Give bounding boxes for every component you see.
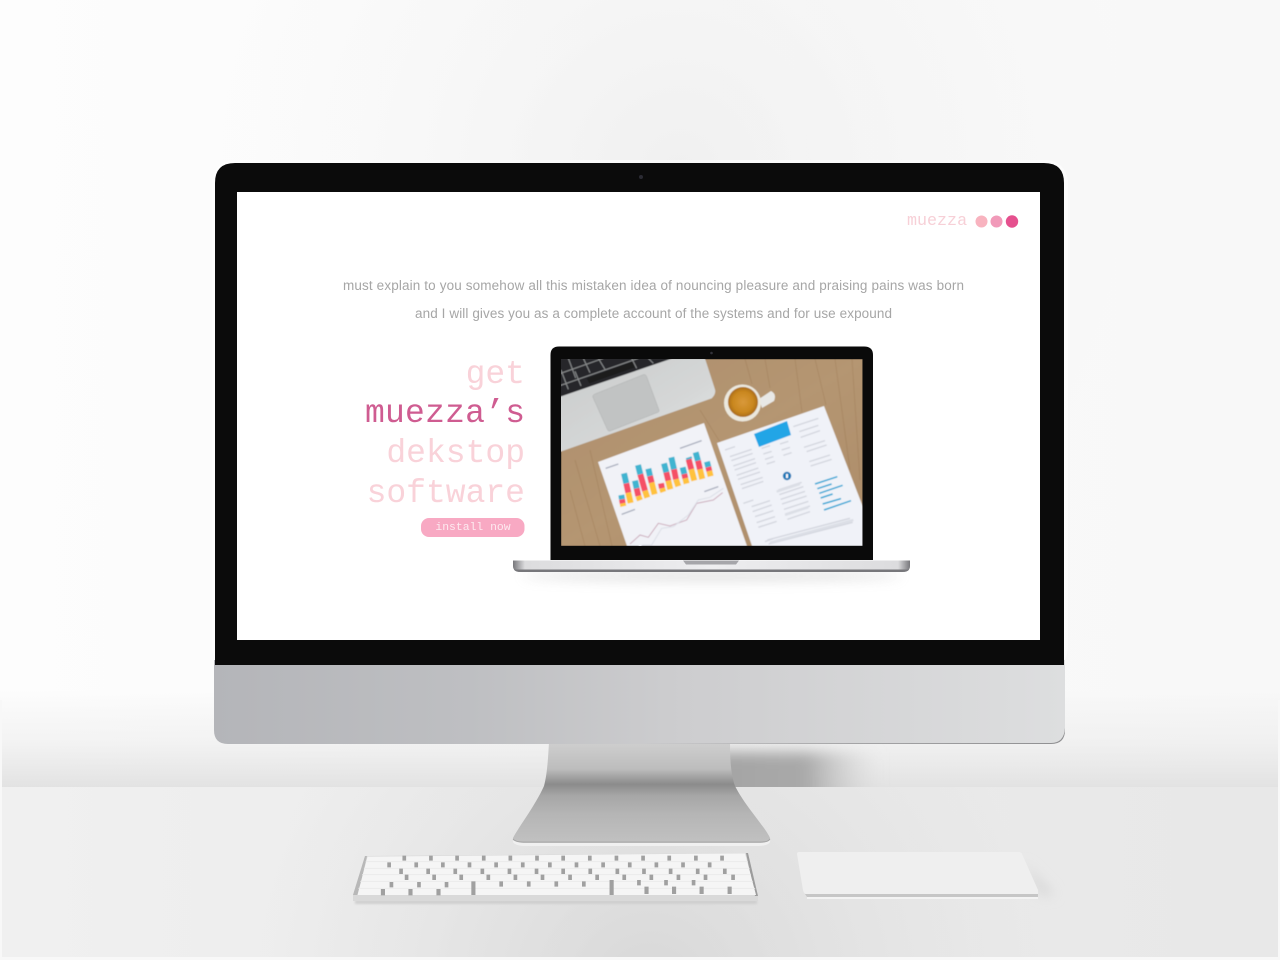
brand name: muezza — [907, 212, 967, 231]
monitor chin — [214, 660, 1065, 744]
intro paragraph: must explain to you somehow all this mistaken idea of nouncing pleasure and praising pains was born — [343, 278, 964, 293]
headline — [365, 356, 525, 512]
brand logo — [907, 212, 1018, 231]
coffee cup — [724, 384, 775, 422]
keyboard — [353, 853, 758, 904]
monitor camera — [639, 175, 643, 179]
report paper — [717, 406, 863, 546]
chart paper — [598, 423, 747, 550]
headline: dekstop — [386, 435, 525, 472]
trackpad rim — [805, 894, 1038, 897]
keyboard shadow — [355, 900, 757, 904]
install button — [421, 518, 524, 537]
headline: get — [466, 356, 525, 393]
laptop shadow — [522, 571, 902, 581]
brand dots — [976, 215, 1018, 228]
photo trackpad — [593, 375, 659, 431]
photo laptop — [555, 358, 715, 454]
report text lines — [725, 418, 853, 544]
headline: muezza’s — [365, 395, 525, 432]
desk photo — [555, 358, 863, 550]
image edge strips — [0, 700, 1280, 960]
trackpad shadow — [1022, 862, 1055, 895]
trackpad — [797, 852, 1055, 899]
monitor stand — [513, 742, 770, 846]
report blue header — [754, 421, 791, 447]
laptop bezel — [550, 346, 873, 560]
laptop — [513, 346, 910, 572]
chart titles — [606, 441, 718, 514]
report sidebar lines — [815, 477, 851, 510]
wood table — [561, 359, 863, 546]
monitor — [212, 160, 1068, 744]
monitor halo — [212, 160, 1068, 670]
photo keyboard — [555, 358, 672, 397]
laptop camera — [710, 352, 713, 354]
desk surface — [0, 787, 1280, 960]
bar chart — [606, 441, 723, 550]
intro paragraph: and I will gives you as a complete account of the systems and for use expound — [415, 306, 892, 321]
keyboard keys — [357, 853, 756, 895]
monitor screen — [237, 192, 1040, 640]
install button: install now — [435, 522, 511, 534]
intro paragraph — [343, 278, 964, 321]
keyboard body — [353, 853, 758, 901]
laptop base — [513, 560, 910, 572]
laptop notch — [683, 560, 739, 564]
headline: software — [367, 475, 525, 512]
monitor bezel — [215, 163, 1064, 665]
trackpad top — [797, 852, 1038, 894]
wall shadow behind stand — [730, 744, 864, 787]
report blue icon — [783, 472, 791, 480]
line chart — [630, 493, 723, 544]
